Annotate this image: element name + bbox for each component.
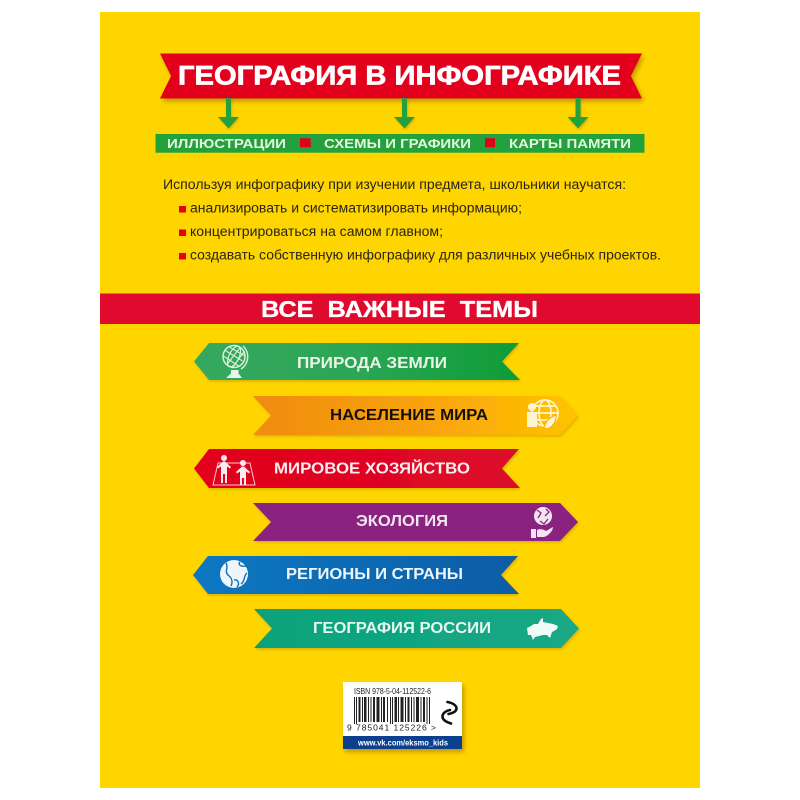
ISBN number: ISBN 978-5-04-112522-6 [354,687,431,696]
icon: globe on stand [223,344,248,378]
section band: all important topics [100,294,700,324]
barcode digits: 9 785041 125226 > [347,722,436,732]
arrow: to illustrations [218,98,239,128]
title ribbon [160,54,642,98]
feature: memory maps: КАРТЫ ПАМЯТИ [509,136,631,151]
icon: two people on a plane [213,455,255,485]
icon: publisher logo [442,702,456,724]
separator square 1 [300,138,311,147]
label: РЕГИОНЫ И СТРАНЫ [286,566,463,583]
bullet 1: анализировать и систематизировать информацию; [190,200,522,216]
ribbon: world population [253,396,578,435]
ribbon: nature of the Earth [194,343,520,380]
feature: charts: СХЕМЫ И ГРАФИКИ [324,136,471,151]
ribbon: world economy [194,449,520,488]
text block: intro and list [163,177,661,262]
label: ГЕОГРАФИЯ РОССИИ [313,620,491,637]
bullet 3: создавать собственную инфографику для различных учебных проектов. [190,248,661,262]
label: ЭКОЛОГИЯ [356,513,448,530]
icon: world globe [220,560,248,588]
intro sentence: Используя инфографику при изучении предмета, школьники научатся: [163,177,626,192]
icon: globe, person and leaf [527,400,558,429]
separator square 2 [485,138,495,147]
title: ГЕОГРАФИЯ В ИНФОГРАФИКЕ [178,60,621,90]
section heading: ВСЕ ВАЖНЫЕ ТЕМЫ [261,296,538,322]
icon: globe over hand [531,507,553,538]
barcode bars [354,697,430,724]
green feature strip [156,134,644,153]
label: НАСЕЛЕНИЕ МИРА [330,407,488,424]
label: ПРИРОДА ЗЕМЛИ [297,355,447,372]
ribbon: regions and countries [193,556,519,594]
barcode sticker [343,682,462,749]
arrow: to memory maps [568,98,588,128]
website band: www.vk.com/eksmo_kids [357,738,448,748]
panel: yellow book cover [100,12,700,788]
ribbon: geography of Russia [254,609,579,648]
label: МИРОВОЕ ХОЗЯЙСТВО [274,458,470,478]
feature: illustrations: ИЛЛЮСТРАЦИИ [167,136,286,151]
icon: map of Russia [527,618,558,640]
ribbon: ecology [253,503,578,541]
arrow: to charts [394,98,415,128]
bullet 2: концентрироваться на самом главном; [190,224,443,239]
